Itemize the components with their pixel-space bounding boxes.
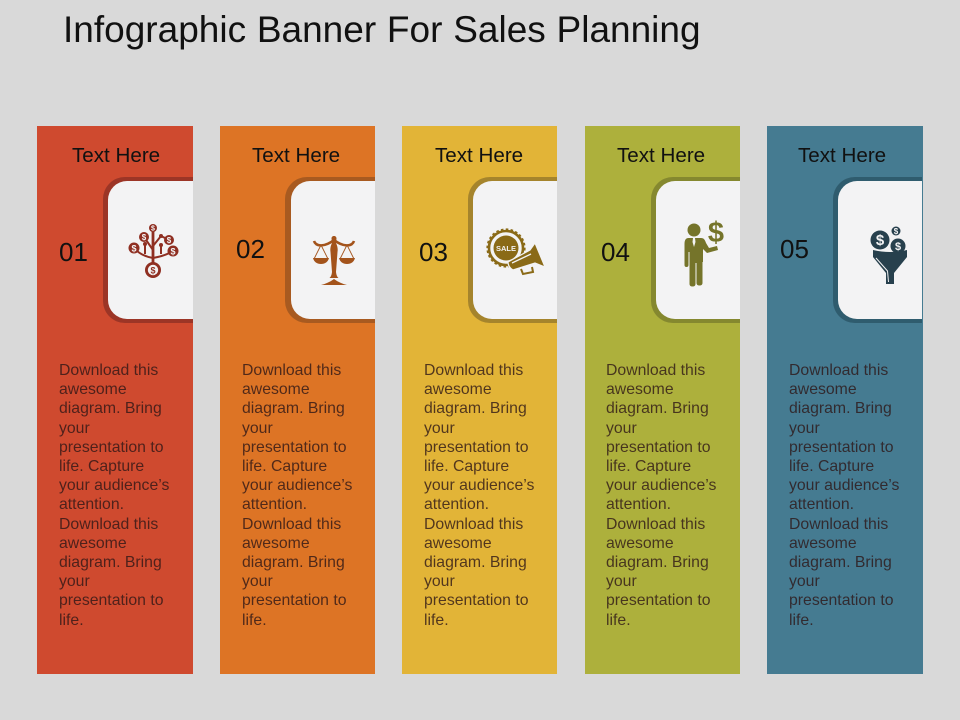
body text: 03: your (424, 420, 455, 437)
body text: 02: attention. (242, 496, 307, 513)
body text: 04: attention. (606, 496, 671, 513)
number: 03: 03 (419, 237, 448, 267)
body text: 01: life. (59, 612, 84, 629)
icon: money tree: $ (170, 246, 176, 256)
body text: 04: awesome (606, 381, 674, 398)
body text: 03: awesome (424, 381, 492, 398)
body text: 02: your (242, 420, 273, 437)
body text: 03: diagram. Bring (424, 400, 527, 417)
body text: 03: attention. (424, 496, 489, 513)
card frame: 02 (285, 177, 375, 323)
body text: 03: presentation to (424, 592, 529, 609)
body text: 02: diagram. Bring (242, 400, 345, 417)
body text: 03: your (424, 573, 455, 590)
body text: 03: Download this (424, 516, 523, 533)
heading: 05: Text Here (798, 144, 886, 167)
body text: 03: Download this (424, 362, 523, 379)
body text: 05: presentation to (789, 439, 894, 456)
body text: 04 (606, 362, 716, 629)
number: 05: 05 (780, 234, 809, 264)
body text: 05: Download this (789, 516, 888, 533)
body text: 04: diagram. Bring (606, 554, 709, 571)
body text: 04: awesome (606, 535, 674, 552)
body text: 05: diagram. Bring (789, 554, 892, 571)
body text: 05: your (789, 420, 820, 437)
card frame: 01 (103, 177, 193, 323)
body text: 02: diagram. Bring (242, 554, 345, 571)
body text: 01: life. Capture (59, 458, 144, 475)
body text: 01: Download this (59, 516, 158, 533)
body text: 01: presentation to (59, 439, 164, 456)
title: Infographic Banner For Sales Planning (63, 9, 701, 50)
icon: money funnel: $ (894, 227, 899, 236)
card: 05 (838, 181, 922, 319)
icon: money tree (128, 224, 178, 278)
body text: 05: awesome (789, 381, 857, 398)
body text: 03: diagram. Bring (424, 554, 527, 571)
body text: 04: life. (606, 612, 631, 629)
icon: money funnel: $ (876, 232, 885, 249)
body text: 05: your (789, 573, 820, 590)
body text: 01: awesome (59, 535, 127, 552)
card frame: 05 (833, 177, 922, 323)
body text: 01: your audience’s (59, 477, 169, 494)
body text: 03: life. Capture (424, 458, 509, 475)
body text: 01: diagram. Bring (59, 400, 162, 417)
panel: 03 (402, 126, 557, 674)
heading: 01: Text Here (72, 144, 160, 167)
body text: 03: presentation to (424, 439, 529, 456)
body text: 05: presentation to (789, 592, 894, 609)
body text: 01: attention. (59, 496, 124, 513)
heading: 04: Text Here (617, 144, 705, 167)
icon: money tree: $ (131, 244, 137, 254)
body text: 01 (59, 362, 169, 629)
card frame: 03 (468, 177, 557, 323)
body text: 02: your audience’s (242, 477, 352, 494)
body text: 02: awesome (242, 535, 310, 552)
body text: 03: awesome (424, 535, 492, 552)
body text: 01: presentation to (59, 592, 164, 609)
body text: 03: life. (424, 612, 449, 629)
panel: 01 (37, 126, 193, 674)
body text: 03: your audience’s (424, 477, 534, 494)
icon: money tree: $ (167, 236, 172, 245)
body text: 01: awesome (59, 381, 127, 398)
body text: 02: presentation to (242, 592, 347, 609)
number: 01: 01 (59, 237, 88, 267)
body text: 05: your audience’s (789, 477, 899, 494)
body text: 04: presentation to (606, 592, 711, 609)
body text: 02: presentation to (242, 439, 347, 456)
body text: 01: your (59, 420, 90, 437)
icon: money tree: $ (151, 226, 155, 232)
heading: 02: Text Here (252, 144, 340, 167)
number: 02: 02 (236, 234, 265, 264)
body text: 05: life. (789, 612, 814, 629)
body text: 02: your (242, 573, 273, 590)
panel: 02 (220, 126, 375, 674)
body text: 04: your (606, 573, 637, 590)
body text: 02: life. Capture (242, 458, 327, 475)
body text: 04: diagram. Bring (606, 400, 709, 417)
body text: 05: Download this (789, 362, 888, 379)
icon: money funnel (870, 226, 907, 284)
card: 03 (473, 181, 557, 319)
body text: 02: Download this (242, 362, 341, 379)
body text: 01: your (59, 573, 90, 590)
body text: 04: presentation to (606, 439, 711, 456)
body text: 04: Download this (606, 362, 705, 379)
icon: money tree: $ (142, 233, 147, 242)
icon: businessman with dollar: $ (708, 217, 724, 249)
icon: money tree: $ (150, 266, 156, 276)
body text: 02 (242, 362, 352, 629)
card frame: 04 (651, 177, 740, 323)
icon: businessman with dollar (684, 217, 724, 286)
body text: 05: attention. (789, 496, 854, 513)
panel: 04 (585, 126, 740, 674)
body text: 05 (789, 362, 899, 629)
card: 02 (291, 181, 375, 319)
body text: 01: diagram. Bring (59, 554, 162, 571)
body text: 04: Download this (606, 516, 705, 533)
body text: 03 (424, 362, 534, 629)
icon: sale badge and megaphone: SALE (496, 244, 516, 253)
card: 01 (108, 181, 193, 319)
icon: money funnel: $ (895, 241, 901, 253)
body text: 01: Download this (59, 362, 158, 379)
heading: 03: Text Here (435, 144, 523, 167)
body text: 02: awesome (242, 381, 310, 398)
panel: 05 (767, 126, 923, 674)
body text: 05: life. Capture (789, 458, 874, 475)
body text: 02: life. (242, 612, 267, 629)
icon: sale badge and megaphone (486, 228, 544, 276)
card: 04 (656, 181, 740, 319)
body text: 02: Download this (242, 516, 341, 533)
body text: 05: awesome (789, 535, 857, 552)
body text: 04: life. Capture (606, 458, 691, 475)
body text: 05: diagram. Bring (789, 400, 892, 417)
number: 04: 04 (601, 237, 630, 267)
body text: 04: your audience’s (606, 477, 716, 494)
body text: 04: your (606, 420, 637, 437)
icon: scales (312, 236, 356, 285)
